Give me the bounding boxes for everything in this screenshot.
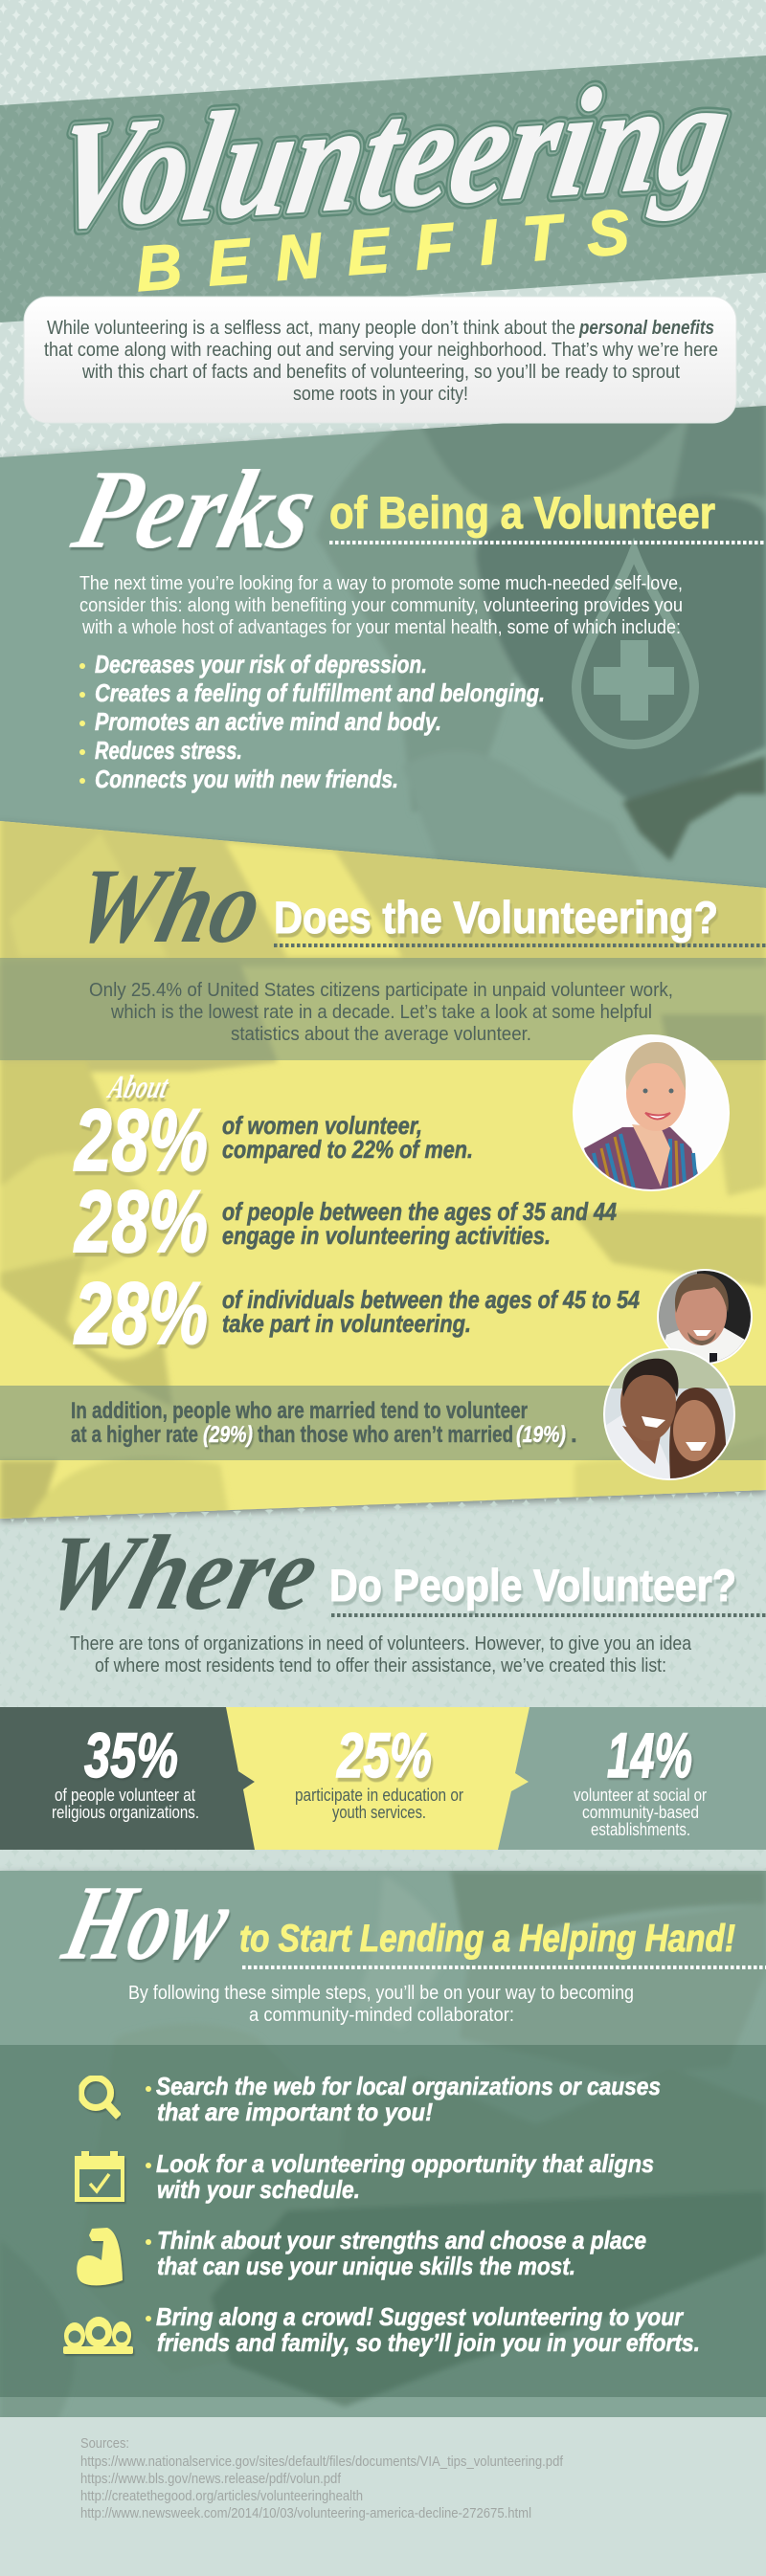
text: where intro (70, 1632, 692, 1677)
list: perks bullets: Creates a feeling of fulfillment and belonging. (95, 678, 545, 707)
stat: 28% ages 45-54: of individuals between the ages of 45 to 54 (222, 1285, 640, 1314)
step: strengths (77, 2226, 646, 2285)
list: perks bullets: Decreases your risk of depression. (95, 650, 427, 678)
hands photo (316, 402, 766, 895)
icon: group of people (63, 2317, 133, 2354)
stat: about 28% women: About (104, 1069, 172, 1105)
stat: 35% religious: religious organizations. (52, 1802, 199, 1822)
panel: perks section (0, 402, 766, 895)
heading: Who Does the Volunteering?: Does the Volunteering? (274, 892, 718, 943)
text: where intro: of where most residents tend to offer their assistance, we’ve created this list: (95, 1654, 666, 1677)
text: how intro: a community-minded collaborator: (249, 2004, 514, 2026)
stat: about 28% women (73, 1069, 473, 1189)
stat: 28% ages 35-44: engage in volunteering activities. (222, 1221, 551, 1250)
stat: about 28% women: compared to 22% of men. (222, 1135, 473, 1164)
icon: calendar (75, 2151, 124, 2202)
step: search: that are important to you! (157, 2098, 433, 2126)
step: search: Search the web for local organizations or causes (156, 2072, 661, 2100)
stat: 28% ages 45-54: 28% (73, 1265, 208, 1363)
list: perks bullets: Connects you with new friends. (95, 765, 398, 793)
stat: 25% education: youth services. (332, 1802, 426, 1822)
text: married stat: than those who aren’t married (258, 1422, 513, 1448)
heading: Perks of Being a Volunteer: Perks (62, 447, 328, 572)
text: who intro: which is the lowest rate in a decade. Let’s take a look at some helpful (110, 1001, 652, 1023)
icon: flexed arm (77, 2228, 123, 2285)
panel: sources: http://www.newsweek.com/2014/10/03/volunteering-america-decline-272675.html (80, 2506, 531, 2521)
text: perks intro: consider this: along with benefiting your community, volunteering provides you (79, 594, 683, 616)
overlay band: steps (0, 2045, 766, 2397)
photo: couple (603, 1348, 735, 1480)
heading: Where Do People Volunteer?: Where (33, 1514, 330, 1632)
heading: How to Start Lending a Helping Hand!: How (53, 1864, 242, 1983)
stat: 25% education: participate in education or (295, 1785, 463, 1805)
hands photo (0, 1871, 766, 2421)
panel: where section (0, 1491, 766, 1876)
stat: 35% religious: 35% (84, 1720, 178, 1790)
step: crowd (63, 2302, 700, 2357)
stats strip (0, 1707, 766, 1850)
text: who intro: Only 25.4% of United States citizens participate in unpaid volunteer work, (89, 979, 673, 1001)
stat: about 28% women: 28% (73, 1092, 208, 1189)
panel: intro box: While volunteering is a selfless act, many people don’t think about the (47, 317, 575, 339)
panel: who section (0, 813, 766, 1521)
panel: intro box: some roots in your city! (293, 383, 468, 405)
step: schedule: Look for a volunteering opportunity that aligns (156, 2149, 654, 2178)
panel: title banner (0, 48, 766, 322)
text: married stat: at a higher rate (71, 1422, 198, 1448)
panel: sources (0, 2417, 766, 2576)
stat: 35% religious (0, 1707, 257, 1850)
stat: 28% ages 35-44: 28% (73, 1173, 208, 1271)
step: search (80, 2072, 661, 2126)
step: schedule: with your schedule. (157, 2175, 360, 2204)
text: how intro (128, 1982, 634, 2026)
heading: How to Start Lending a Helping Hand! (53, 1864, 766, 1983)
heading: Where Do People Volunteer? (33, 1514, 766, 1632)
panel: sources: https://www.bls.gov/news.release/pdf/volun.pdf (80, 2472, 342, 2487)
icon: magnifier (80, 2078, 119, 2117)
text: married stat: (29%) (203, 1422, 253, 1448)
text: married stat: (19%) (516, 1422, 566, 1448)
list: perks bullets: Reduces stress. (95, 736, 242, 765)
panel: intro box: personal benefits (578, 317, 714, 339)
icon: water drop with cross (576, 551, 694, 744)
step: crowd: friends and family, so they’ll join you in your efforts. (157, 2328, 700, 2357)
stat: 28% ages 45-54: take part in volunteering. (222, 1309, 471, 1338)
text: how intro: By following these simple steps, you’ll be on your way to becoming (128, 1982, 634, 2004)
text: married stat: . (571, 1422, 577, 1448)
text: married stat (71, 1398, 577, 1448)
text: who intro (89, 979, 673, 1045)
step: crowd: Bring along a crowd! Suggest volunteering to your (156, 2302, 685, 2331)
heading: Who Does the Volunteering?: Who (63, 847, 275, 966)
panel: intro box: with this chart of facts and benefits of volunteering, so you’ll be ready to sprout (81, 361, 680, 383)
text: who intro: statistics about the average volunteer. (231, 1023, 531, 1045)
stat: 14% social: volunteer at social or (574, 1785, 707, 1805)
title: Benefits: BENEFITS (133, 196, 632, 304)
panel: how section (0, 1864, 766, 2421)
stat: 28% ages 35-44 (73, 1173, 617, 1271)
step: strengths: Think about your strengths and choose a place (157, 2226, 646, 2254)
stat: about 28% women: of women volunteer, (222, 1111, 422, 1140)
stat: 35% religious: of people volunteer at (55, 1785, 195, 1805)
step: strengths: that can use your unique skills the most. (157, 2252, 575, 2280)
stat: 14% social (574, 1720, 707, 1839)
photo: woman (573, 1034, 730, 1196)
text: perks intro: The next time you’re looking for a way to promote some much-needed self-love, (79, 572, 683, 594)
stat: 14% social: establishments. (591, 1819, 690, 1839)
text: married stat: In addition, people who are married tend to volunteer (71, 1398, 528, 1424)
stat: 25% education (226, 1707, 529, 1850)
hands photo (0, 813, 766, 1521)
text: perks intro (79, 572, 683, 638)
panel: intro box (24, 297, 736, 423)
stat: 14% social: community-based (582, 1802, 699, 1822)
stat: 25% education: 25% (336, 1720, 432, 1790)
stat: 14% social: 14% (607, 1720, 692, 1790)
stat: 28% ages 35-44: of people between the ages of 35 and 44 (222, 1197, 617, 1226)
photo: man (657, 1269, 755, 1365)
panel: sources: https://www.nationalservice.gov/sites/default/files/documents/VIA_tips_volunteering.pdf (80, 2454, 564, 2470)
heading: Perks of Being a Volunteer: of Being a Volunteer (329, 487, 715, 538)
list: perks bullets (79, 650, 545, 793)
heading: Who Does the Volunteering? (63, 847, 766, 966)
panel: sources: Sources: (80, 2436, 129, 2452)
heading: Perks of Being a Volunteer (62, 447, 766, 572)
stat: 28% ages 45-54 (73, 1265, 640, 1363)
text: perks intro: with a whole host of advantages for your mental health, some of which include: (81, 616, 681, 638)
panel: sources: http://createthegood.org/articles/volunteeringhealth (80, 2489, 363, 2504)
overlay band: married (0, 1386, 766, 1460)
overlay band: intro (0, 958, 766, 1060)
step: schedule (75, 2149, 654, 2204)
list: perks bullets: Promotes an active mind and body. (95, 707, 441, 736)
